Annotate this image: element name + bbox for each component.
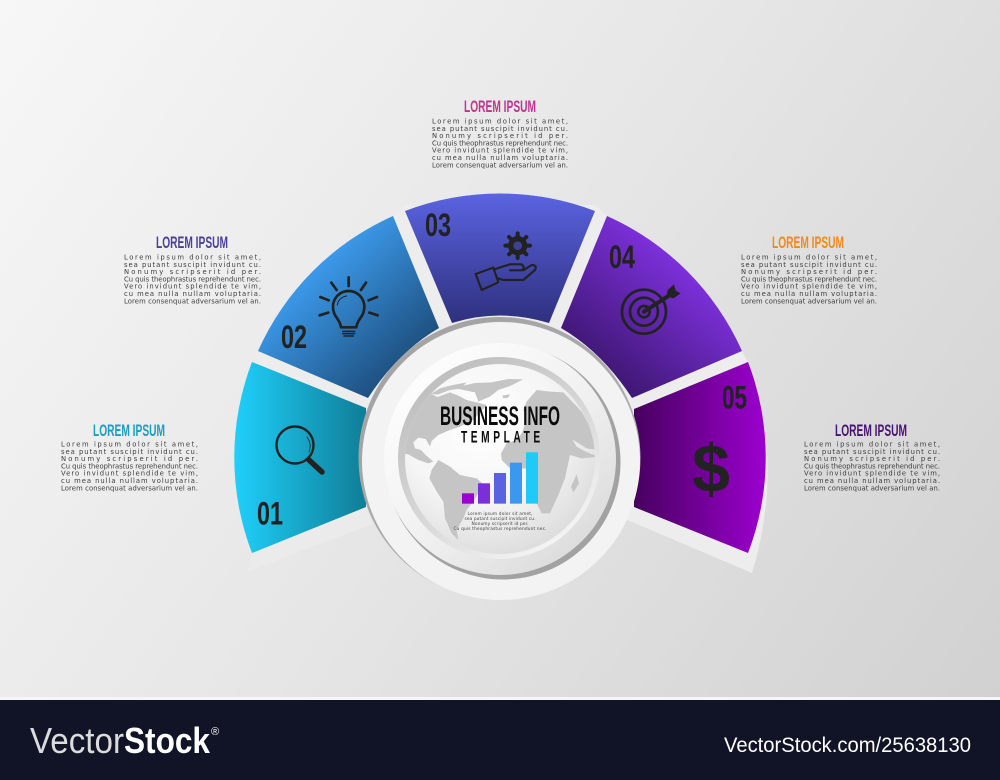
body 04: Lorem consenquat adversarium vel an. xyxy=(741,297,877,305)
number 04: 04 xyxy=(609,239,635,275)
heading 03: LOREM IPSUM xyxy=(464,98,536,116)
body 02: Lorem consenquat adversarium vel an. xyxy=(124,297,261,305)
body 02: Cu quis theophrastus reprehendunt nec. xyxy=(124,275,261,283)
body 04: cu mea nulla nullam voluptaria. xyxy=(741,290,877,298)
left shadow band xyxy=(247,507,372,572)
body 01: Lorem ipsum dolor sit amet, xyxy=(61,440,198,448)
footer bar xyxy=(0,697,1000,780)
body 03: sea putant suscipit invidunt cu. xyxy=(432,125,568,133)
segment 02 xyxy=(258,216,439,398)
heading 02: LOREM IPSUM xyxy=(156,234,228,252)
thin ring xyxy=(398,357,600,559)
body 03: cu mea nulla nullam voluptaria. xyxy=(432,154,568,162)
body 01: Lorem consenquat adversarium vel an. xyxy=(61,484,198,492)
body 05: Lorem ipsum dolor sit amet, xyxy=(804,440,940,448)
icon: dollar sign: $ xyxy=(692,431,730,507)
number 02: 02 xyxy=(281,319,307,355)
center caption xyxy=(454,511,546,532)
body 02: Nonumy scripserit id per. xyxy=(124,268,261,276)
backing band xyxy=(243,205,768,573)
body 03: Vero invidunt splendide te vim, xyxy=(432,147,568,155)
wheel: five segments with backing xyxy=(234,193,768,573)
body 05: sea putant suscipit invidunt cu. xyxy=(804,448,940,456)
body 01: sea putant suscipit invidunt cu. xyxy=(61,448,198,456)
world map xyxy=(395,379,598,540)
body 03 xyxy=(432,118,568,169)
body 03: Nonumy scripserit id per. xyxy=(432,132,568,140)
icon: target with arrow xyxy=(622,284,681,334)
icon: light bulb xyxy=(320,277,378,336)
body 02: cu mea nulla nullam voluptaria. xyxy=(124,290,261,298)
body 01: Vero invidunt splendide te vim, xyxy=(61,470,198,478)
subtitle: TEMPLATE xyxy=(461,427,540,446)
number 05: 05 xyxy=(722,380,747,416)
body 05: Vero invidunt splendide te vim, xyxy=(804,470,940,478)
heading 04: LOREM IPSUM xyxy=(772,234,844,252)
body 01: Cu quis theophrastus reprehendunt nec. xyxy=(61,462,198,470)
number 03: 03 xyxy=(425,207,451,243)
text block 03 xyxy=(432,98,568,169)
body 02: Vero invidunt splendide te vim, xyxy=(124,283,261,291)
center caption: Lorem ipsum dolor sit amet, xyxy=(468,511,532,517)
center caption: sea putant suscipit invidunt cu. xyxy=(464,516,536,522)
body 05: Cu quis theophrastus reprehendunt nec. xyxy=(804,462,940,470)
bar chart xyxy=(462,452,538,504)
footer logo: Vector xyxy=(30,720,124,761)
body 02 xyxy=(124,254,261,305)
body 04: Vero invidunt splendide te vim, xyxy=(741,283,877,291)
segment 03 xyxy=(405,193,595,323)
text block 02 xyxy=(124,234,261,305)
outer ring xyxy=(358,317,640,599)
heading 01: LOREM IPSUM xyxy=(93,422,165,440)
footer image id: VectorStock.com/25638130 xyxy=(724,734,971,757)
body 01: cu mea nulla nullam voluptaria. xyxy=(61,477,198,485)
icon: magnifying glass xyxy=(276,426,322,472)
center caption: Nonumy scripserit id per. xyxy=(472,521,528,527)
body 01 xyxy=(61,440,198,492)
title: BUSINESS INFO xyxy=(440,401,560,431)
heading 05: LOREM IPSUM xyxy=(835,422,907,440)
inner disc xyxy=(384,343,616,575)
body 04: Lorem ipsum dolor sit amet, xyxy=(741,254,877,262)
body 04: sea putant suscipit invidunt cu. xyxy=(741,261,877,269)
central badge xyxy=(358,317,640,600)
icon: hand holding gear xyxy=(476,233,536,290)
text block 01 xyxy=(61,422,198,492)
body 05: Lorem consenquat adversarium vel an. xyxy=(804,484,940,492)
body 05: cu mea nulla nullam voluptaria. xyxy=(804,477,940,485)
text block 04 xyxy=(741,234,877,305)
body 02: sea putant suscipit invidunt cu. xyxy=(124,261,261,269)
body 03: Lorem consenquat adversarium vel an. xyxy=(432,161,568,169)
number 01: 01 xyxy=(257,496,283,532)
globe disc xyxy=(405,364,595,554)
segment 01 xyxy=(234,362,366,553)
body 05: Nonumy scripserit id per. xyxy=(804,455,940,463)
body 04: Cu quis theophrastus reprehendunt nec. xyxy=(741,275,877,283)
footer logo: Stock xyxy=(124,720,211,761)
segment 05 xyxy=(634,362,766,553)
footer logo xyxy=(30,720,219,761)
body 02: Lorem ipsum dolor sit amet, xyxy=(124,254,261,262)
body 01: Nonumy scripserit id per. xyxy=(61,455,198,463)
center caption: Cu quis theophrastus reprehendunt nec. xyxy=(454,526,546,532)
crescent xyxy=(386,344,620,580)
footer logo: ® xyxy=(211,726,219,738)
body 05 xyxy=(804,440,940,492)
segment 04 xyxy=(561,216,742,398)
body 04: Nonumy scripserit id per. xyxy=(741,268,877,276)
text block 05 xyxy=(804,422,940,492)
body 03: Cu quis theophrastus reprehendunt nec. xyxy=(432,139,568,147)
body 04 xyxy=(741,254,877,305)
white disc xyxy=(362,322,640,600)
body 03: Lorem ipsum dolor sit amet, xyxy=(432,118,568,126)
